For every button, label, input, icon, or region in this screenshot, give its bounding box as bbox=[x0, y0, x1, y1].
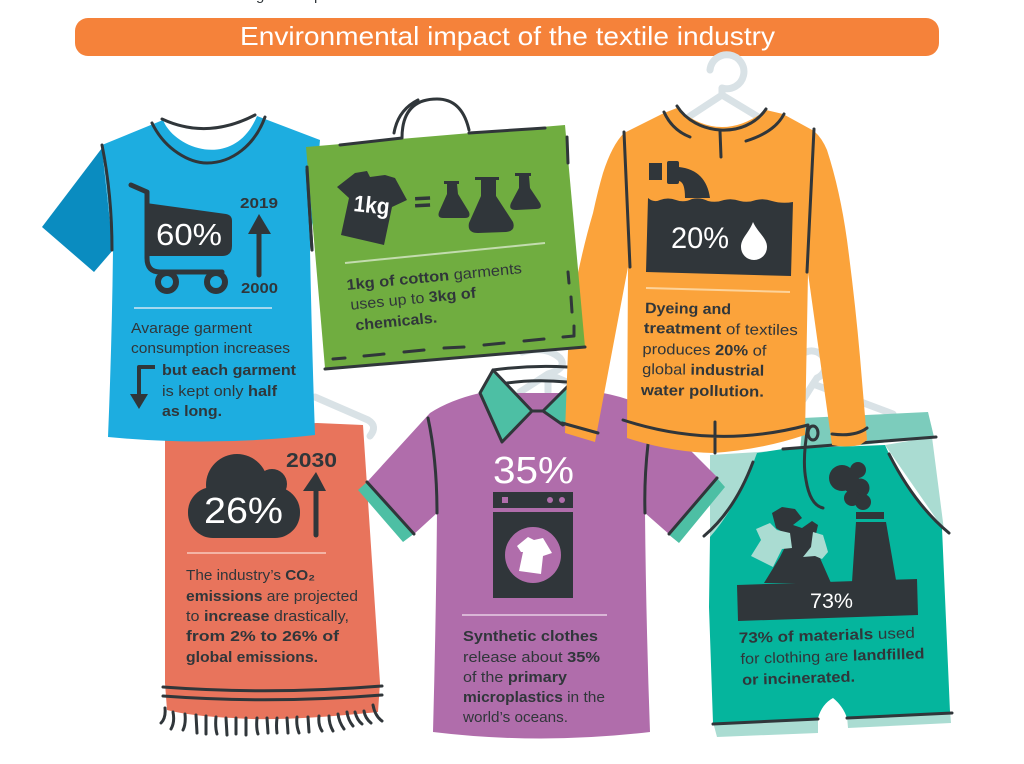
panel: shorts, waste bbox=[704, 412, 952, 737]
text: materials landfilled: or incinerated. bbox=[742, 669, 855, 689]
panel: tote bag, chemicals bbox=[306, 99, 585, 369]
title banner: Environmental impact of the textile industry bbox=[240, 21, 775, 51]
text: garment consumption: consumption increases bbox=[131, 340, 290, 357]
icon: 1kg t-shirt equals 3 flasks bbox=[337, 171, 541, 245]
bag handles bbox=[394, 99, 469, 138]
arrow down bbox=[130, 367, 155, 409]
text: dyeing: global industrial bbox=[642, 361, 764, 380]
icon: pipe and polluted water: 20% bbox=[671, 222, 729, 255]
icon: 1kg t-shirt equals 3 flasks: 1kg bbox=[352, 190, 391, 220]
35% figure: 35% bbox=[493, 450, 574, 492]
sweater seams bbox=[562, 106, 867, 453]
polo collar bbox=[480, 366, 590, 442]
text: garment consumption bbox=[131, 320, 296, 420]
divider bbox=[134, 307, 272, 309]
polo shirt shape bbox=[367, 393, 718, 738]
arrow from 2000 to 2019: 2000 bbox=[241, 280, 278, 297]
text: materials landfilled bbox=[739, 625, 925, 689]
text: microplastics: Synthetic clothes bbox=[463, 628, 598, 645]
text: garment consumption: Avarage garment bbox=[131, 320, 253, 337]
title banner bbox=[75, 18, 939, 56]
polo cuffs bbox=[358, 478, 725, 543]
panel: scarf, CO2 bbox=[161, 423, 382, 735]
text: materials landfilled: for clothing are landfilled bbox=[740, 646, 925, 668]
text: microplastics: of the primary bbox=[463, 669, 568, 686]
t-shirt shape bbox=[102, 116, 320, 442]
divider bbox=[345, 243, 545, 263]
text: garment consumption: but each garment bbox=[162, 362, 296, 379]
text: CO2 emissions bbox=[186, 567, 358, 666]
text: dyeing bbox=[640, 300, 798, 401]
arrow to 2030: 2030 bbox=[286, 450, 337, 472]
text: garment consumption: as long. bbox=[162, 403, 222, 420]
icon: shopping cart with 60% bbox=[131, 185, 232, 291]
text: materials landfilled: 73% of materials used bbox=[739, 625, 915, 647]
bag stitching bbox=[307, 128, 585, 369]
arrow from 2000 to 2019: 2019 bbox=[240, 195, 278, 212]
text: cotton chemicals: 1kg of cotton garments bbox=[346, 260, 523, 294]
text: cotton chemicals: chemicals. bbox=[355, 310, 438, 334]
text: dyeing: water pollution. bbox=[640, 382, 764, 401]
text: dyeing: Dyeing and bbox=[645, 300, 731, 318]
text: CO2 emissions: to increase drastically, bbox=[186, 608, 349, 625]
t-shirt neck and seams bbox=[102, 115, 312, 250]
icon: factory and clothing waste bbox=[737, 462, 918, 621]
panel: polo shirt, microplastics bbox=[358, 366, 725, 738]
panel: sweater, water pollution bbox=[562, 106, 867, 453]
bag shape bbox=[306, 125, 585, 368]
text: dyeing: produces 20% of bbox=[642, 341, 768, 360]
text: cotton chemicals: uses up to 3kg of bbox=[350, 285, 478, 314]
polo seams bbox=[367, 418, 717, 534]
scarf stripes and fringe bbox=[161, 686, 382, 735]
divider bbox=[646, 288, 790, 292]
text: CO2 emissions: global emissions. bbox=[186, 649, 318, 666]
clothes hangers behind garments bbox=[315, 55, 893, 436]
clipped text at top edge bbox=[256, 0, 322, 4]
icon: cloud with 26%: 26% bbox=[204, 490, 283, 531]
arrow to 2030 bbox=[286, 450, 337, 535]
shorts shape bbox=[704, 412, 952, 737]
icon: factory and clothing waste: 73% bbox=[810, 590, 853, 613]
text: microplastics: microplastics in the bbox=[463, 689, 605, 706]
text: cotton chemicals bbox=[346, 260, 527, 335]
divider bbox=[187, 552, 326, 554]
icon: shopping cart with 60%: 60% bbox=[156, 217, 222, 252]
text: dyeing: treatment of textiles bbox=[644, 320, 798, 339]
text: CO2 emissions: from 2% to 26% of bbox=[186, 628, 340, 645]
text: garment consumption: is kept only half bbox=[162, 383, 278, 400]
panel: t-shirt, garment consumption bbox=[42, 115, 320, 442]
text: CO2 emissions: The industry’s CO₂ bbox=[186, 567, 315, 584]
text: microplastics: release about 35% bbox=[463, 649, 600, 666]
icon: cloud with 26% bbox=[188, 454, 300, 538]
sweater shape bbox=[565, 108, 867, 453]
divider bbox=[462, 614, 607, 616]
text: microplastics bbox=[462, 628, 605, 726]
icon: washing machine bbox=[493, 492, 573, 598]
text: CO2 emissions: emissions are projected bbox=[186, 588, 358, 605]
icon: pipe and polluted water bbox=[646, 161, 793, 276]
scarf shape bbox=[165, 423, 380, 719]
t-shirt sleeve bbox=[42, 148, 113, 272]
arrow from 2000 to 2019 bbox=[240, 195, 278, 297]
text: microplastics: world’s oceans. bbox=[462, 709, 568, 726]
